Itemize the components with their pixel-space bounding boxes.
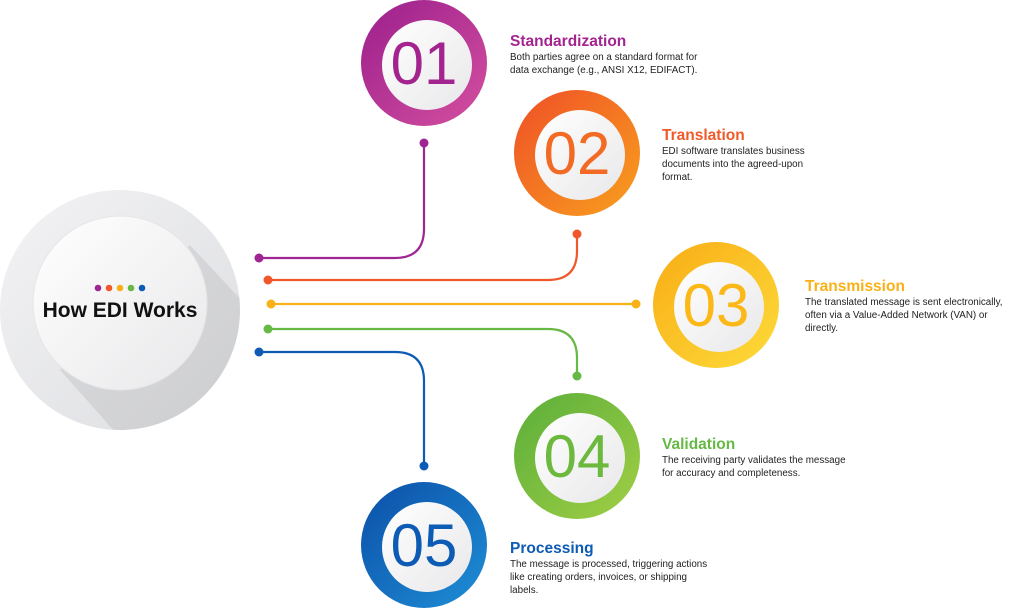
step 04 circle: 04 — [544, 423, 610, 490]
step 02 text: documents into the agreed-upon — [662, 159, 803, 170]
step 05 text: like creating orders, invoices, or shipping — [510, 572, 687, 583]
step 03 text: The translated message is sent electronically, — [805, 297, 1002, 308]
step 01 circle: 01 — [391, 30, 457, 97]
step 04 text — [662, 436, 846, 479]
step 04 circle — [514, 393, 640, 519]
step 05 text: labels. — [510, 585, 538, 596]
colored dots — [95, 285, 145, 291]
step 05 text: Processing — [510, 540, 594, 557]
step 02 text — [662, 127, 805, 183]
step 01 text: Both parties agree on a standard format for — [510, 52, 698, 63]
step 01 text: Standardization — [510, 33, 626, 50]
step 03 text — [805, 278, 1002, 334]
connector lines — [259, 143, 636, 466]
step 05 text: The message is processed, triggering actions — [510, 559, 707, 570]
step 05 circle: 05 — [391, 512, 457, 579]
step 05 circle — [361, 482, 487, 608]
step 04 text: The receiving party validates the message — [662, 455, 846, 466]
step 02 text: EDI software translates business — [662, 146, 805, 157]
step 04 text: Validation — [662, 436, 735, 453]
step 02 text: Translation — [662, 127, 745, 144]
step 03 text: often via a Value-Added Network (VAN) or — [805, 310, 988, 321]
step 01 circle — [361, 0, 487, 126]
main circle: How EDI Works — [0, 190, 240, 430]
step 02 text: format. — [662, 172, 692, 183]
step 02 circle — [514, 90, 640, 216]
title: How EDI Works — [43, 299, 197, 322]
step 03 circle: 03 — [683, 272, 749, 339]
step 04 text: for accuracy and completeness. — [662, 468, 800, 479]
step 05 text — [510, 540, 707, 596]
step 02 circle: 02 — [544, 120, 610, 187]
step 03 text: directly. — [805, 323, 838, 334]
step 01 text — [510, 33, 698, 76]
step 01 text: data exchange (e.g., ANSI X12, EDIFACT). — [510, 65, 697, 76]
step 03 text: Transmission — [805, 278, 905, 295]
step 03 circle — [653, 242, 779, 368]
